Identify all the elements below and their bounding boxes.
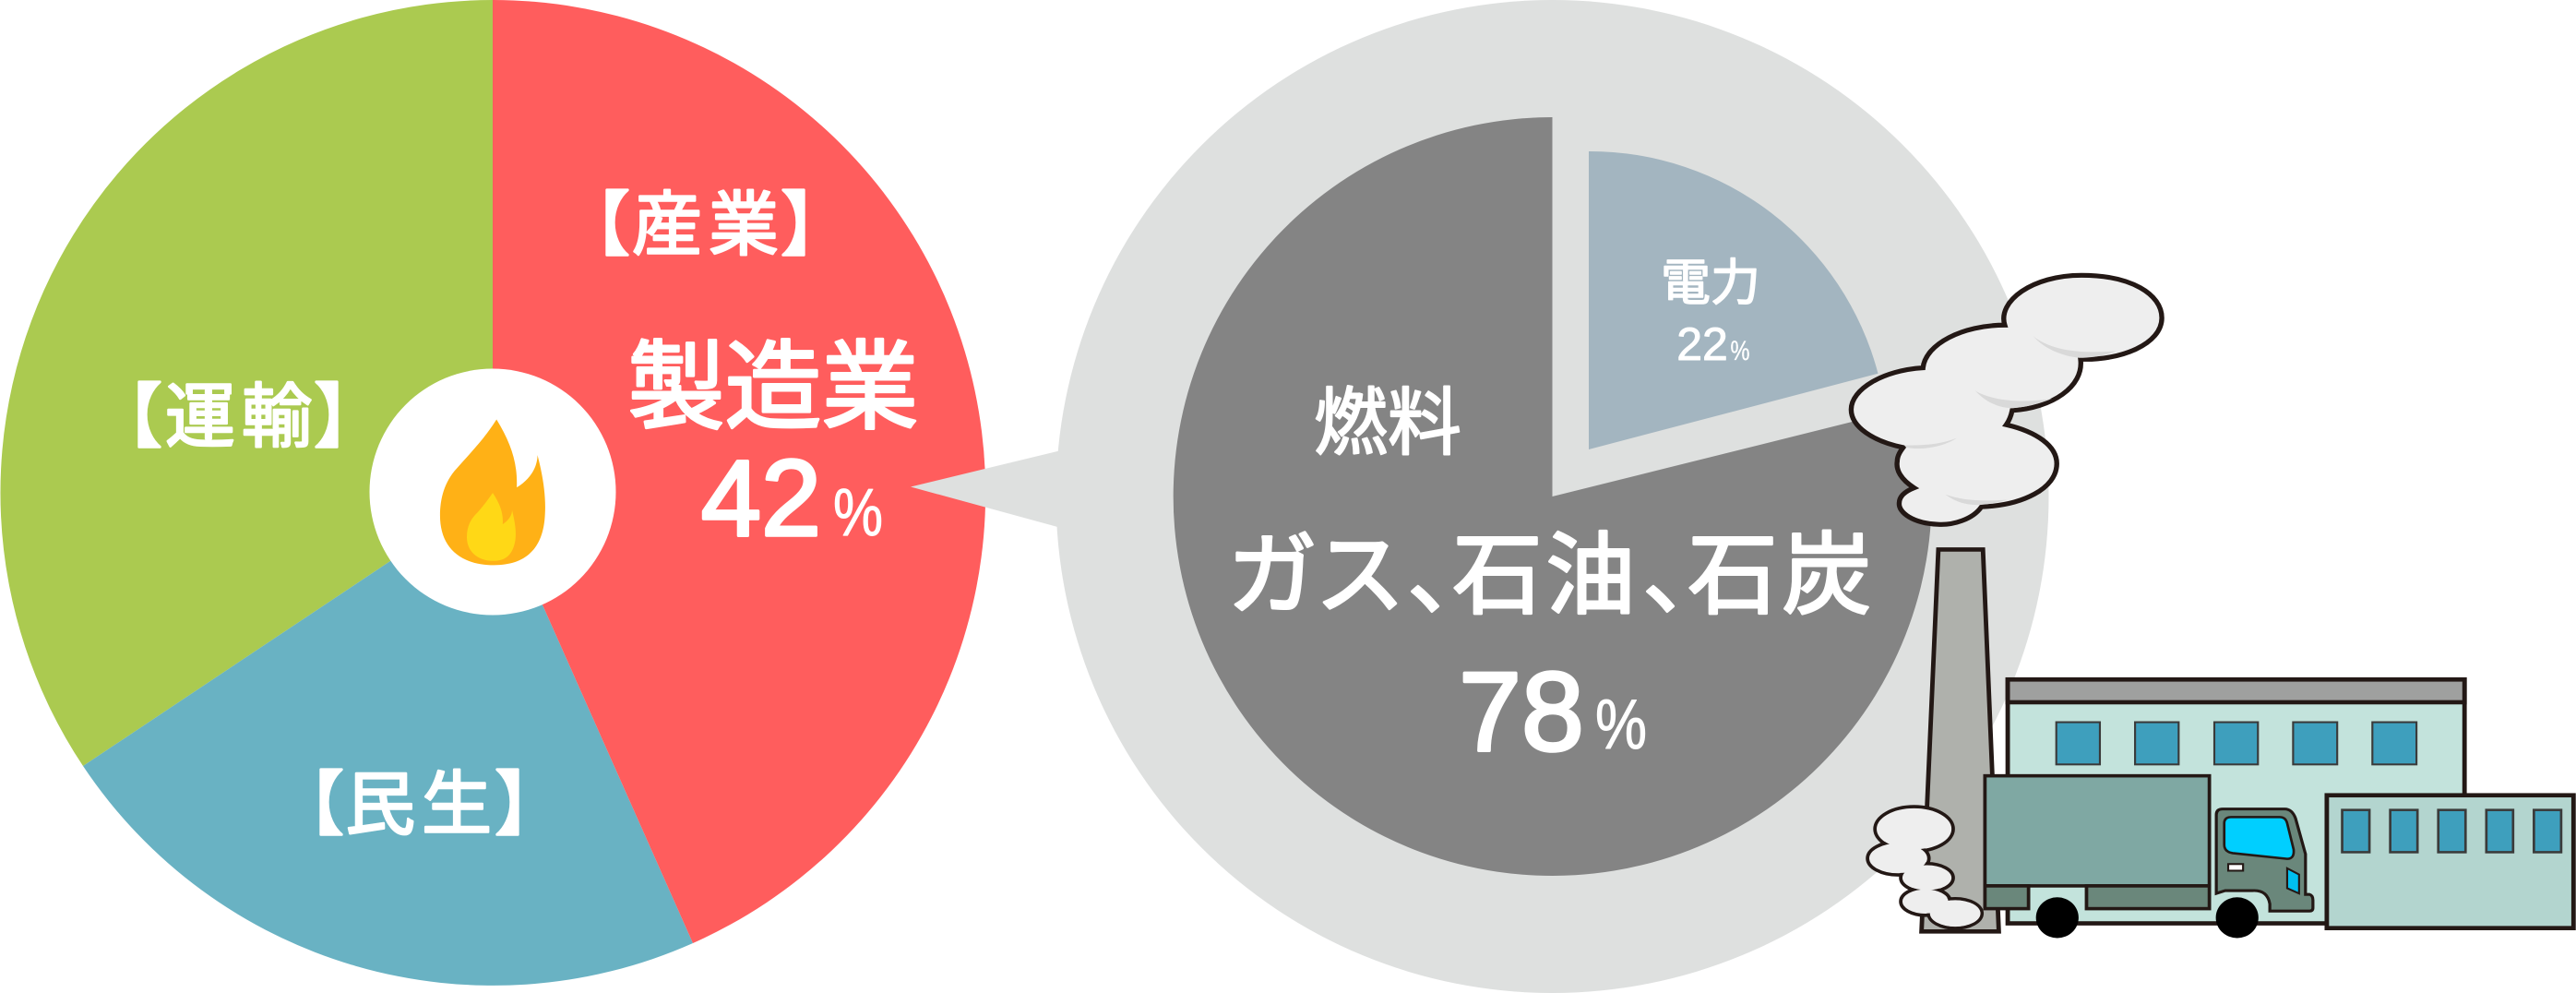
pie slice: residential bbox=[83, 493, 693, 986]
value: 42 percent bbox=[701, 437, 883, 558]
main building bbox=[2008, 679, 2464, 924]
value: 78 percent: % bbox=[1595, 686, 1647, 764]
front building bbox=[2327, 796, 2573, 928]
pie slice: industry bbox=[493, 0, 985, 943]
truck bbox=[1985, 776, 2313, 938]
background circle with callout pointer bbox=[911, 0, 2048, 993]
pie slice: transport bbox=[0, 0, 493, 766]
pie slice: electricity bbox=[1589, 151, 1878, 449]
label: manufacturing: 製造業 bbox=[627, 334, 919, 442]
illustration: factory and truck bbox=[1851, 275, 2573, 938]
value: 78 percent bbox=[1459, 649, 1647, 774]
pie slice: fuel bbox=[1174, 117, 1932, 876]
value: 42 percent: 42 bbox=[701, 437, 821, 558]
center circle bbox=[369, 369, 616, 615]
value: 42 percent: % bbox=[833, 476, 883, 550]
label: fuel: 燃料 bbox=[1314, 382, 1461, 464]
panel: fuel breakdown bbox=[911, 0, 2048, 993]
label: transport: 【運輸】 bbox=[92, 378, 384, 457]
icon: flame bbox=[440, 419, 545, 565]
value: 78 percent: 78 bbox=[1459, 649, 1584, 774]
value: 22 percent: 22 bbox=[1676, 318, 1728, 370]
small smoke cloud bbox=[1867, 807, 1982, 928]
large smoke cloud bbox=[1851, 275, 2162, 524]
panel: sector pie chart bbox=[0, 0, 985, 986]
label: industry: 【産業】 bbox=[560, 186, 851, 265]
value: 22 percent: % bbox=[1731, 336, 1749, 366]
label: residential: 【民生】 bbox=[274, 766, 565, 844]
label: electricity: 電力 bbox=[1661, 256, 1760, 311]
chimney bbox=[1922, 549, 1998, 931]
label: gas, oil, coal: ガス、石油、石炭 bbox=[1227, 525, 1871, 626]
